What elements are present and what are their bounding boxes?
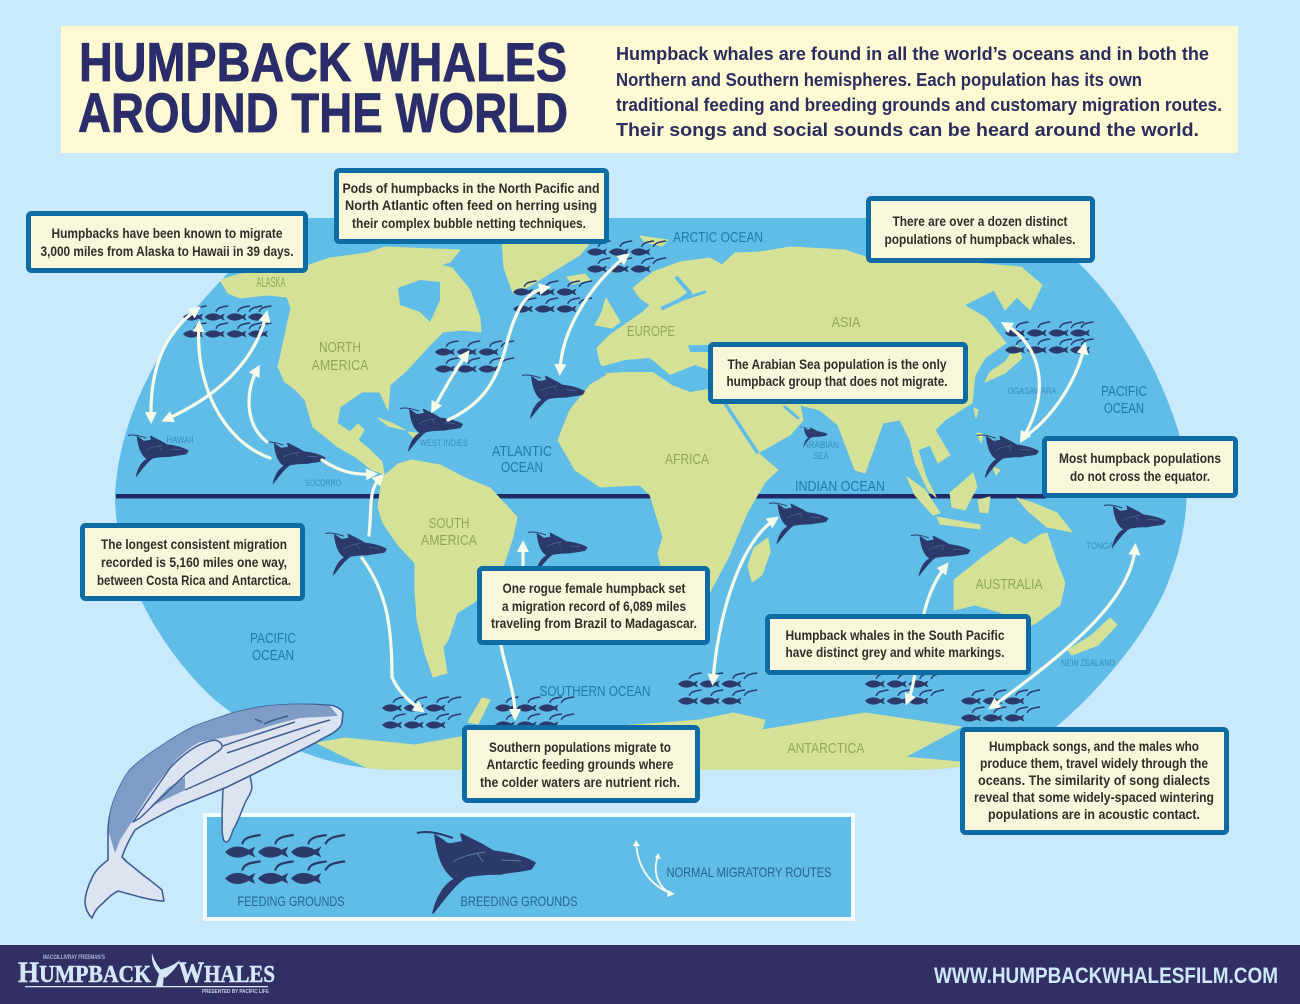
greenland [502,240,592,293]
intro text: Humpback whales are found in all the world’s oceans and in both the [616,44,1209,64]
region labels: SOCORRO [305,478,341,488]
footer [0,945,1300,1004]
callout: bubble netting: Pods of humpbacks in the North Pacific and [342,181,600,196]
callout: populations [868,198,1092,260]
inland seas [663,278,798,452]
callout: longest migration: The longest consistent migration [101,537,287,552]
region labels: AMERICA [312,357,368,374]
callout: arabian sea: The Arabian Sea population is the only [728,357,947,372]
callout: longest migration [82,526,302,598]
region labels: AFRICA [665,451,709,468]
callout: southern populations: the colder waters are nutrient rich. [480,775,680,790]
whale fin [222,775,252,842]
intro text: Their songs and social sounds can be heard around the world. [616,120,1199,140]
region labels: SEA [814,451,828,461]
region labels: ARCTIC OCEAN [673,229,763,246]
callout: alaska to hawaii: Humpbacks have been known to migrate [52,226,283,241]
legend: feeding grounds: FEEDING GROUNDS [238,893,344,909]
intro text: traditional feeding and breeding grounds and customary migration routes. [616,95,1222,115]
legend: feeding grounds [225,835,345,909]
callout: songs: oceans. The similarity of song dialects [978,773,1210,788]
callout: south pacific [768,616,1028,672]
region labels: SOUTH [428,515,470,532]
legend: breeding grounds: BREEDING GROUNDS [460,893,578,909]
region labels: NEW ZEALAND [1061,658,1115,668]
world map [115,218,1187,780]
title panel [61,26,1238,153]
callout: populations: There are over a dozen distinct [892,214,1068,229]
hudson bay [398,280,440,322]
callout: populations: populations of humpback whales. [884,232,1076,247]
continents [220,236,1117,780]
south america [378,460,517,677]
region labels: OCEAN [1104,400,1144,417]
callout: longest migration: recorded is 5,160 miles one way, [101,555,287,570]
callout: songs: populations are in acoustic contact. [988,807,1200,822]
callout: southern populations: Southern populations migrate to [489,740,671,755]
region labels: ASIA [832,314,860,331]
callout: southern populations: Antarctic feeding grounds where [486,757,674,772]
region labels: ANTARCTICA [788,740,864,757]
antarctica [316,712,962,770]
migration arrows [151,257,1135,715]
whale side patch [150,777,185,807]
region labels: INDIAN OCEAN [795,478,885,495]
callout: songs: produce them, travel widely through the [980,756,1208,771]
film logo [18,953,275,995]
region labels: EUROPE [627,323,675,340]
antarctic peninsula [468,698,490,724]
whale flipper and throat lines [133,716,330,822]
region labels: PACIFIC [250,630,296,647]
film logo: WHALES [178,956,275,989]
australia [954,533,1065,630]
callout: equator: do not cross the equator. [1070,469,1210,484]
southeast asia islands [907,408,1072,532]
title: AROUND THE WORLD [78,81,568,144]
callout: songs [962,730,1226,832]
region labels: OCEAN [252,647,294,664]
region labels: TONGA [1086,541,1114,551]
logo tail icon [152,953,180,986]
callout: southern populations [464,728,698,800]
region labels: AMERICA [421,532,477,549]
callout: bubble netting: their complex bubble netting techniques. [352,216,586,231]
region labels: WEST INDIES [420,438,468,448]
region labels: ATLANTIC [492,443,552,460]
whale dark back [109,704,338,853]
callout: songs: reveal that some widely-spaced wintering [974,790,1214,805]
illustration: leaping humpback whale [85,704,343,918]
whale body [85,704,343,918]
canadian arctic islands [367,246,460,265]
film logo: PRESENTED BY PACIFIC LIFE [202,989,269,995]
region labels: OCEAN [501,459,543,476]
region labels: ARABIAN [803,440,839,450]
new zealand [1068,618,1117,655]
british isles [595,298,620,328]
callout: rogue female: traveling from Brazil to Madagascar. [491,616,697,631]
caribbean islands [378,418,422,438]
callout: arabian sea [710,344,966,402]
equator [116,494,1046,498]
callout: equator [1044,438,1236,496]
region labels: AUSTRALIA [976,576,1042,593]
callout: south pacific: have distinct grey and white markings. [786,645,1004,660]
film logo: MACGILLIVRAY FREEMAN’S [43,955,105,961]
breeding ground markers [128,375,1165,576]
callout: rogue female: a migration record of 6,089 miles [502,599,686,614]
intro text [616,44,1222,140]
title [78,31,568,144]
legend: migratory routes: NORMAL MIGRATORY ROUTES [666,864,832,880]
iceland [567,274,590,284]
svalbard [640,236,668,246]
region labels: SOUTHERN OCEAN [540,683,650,700]
callout: bubble netting: North Atlantic often feed on herring using [345,198,597,213]
madagascar [748,538,770,582]
intro text: Northern and Southern hemispheres. Each population has its own [616,70,1142,90]
callout: arabian sea: humpback group that does not migrate. [726,374,948,389]
callout: songs: Humpback songs, and the males who [989,739,1199,754]
eurasia and africa [558,247,1042,625]
legend: breeding grounds [417,832,578,913]
legend: migratory routes [633,840,832,897]
region labels: ALASKA [256,274,286,291]
ocean [115,218,1187,770]
callout: equator: Most humpback populations [1059,451,1221,466]
callout: alaska to hawaii [28,214,306,270]
callout: longest migration: between Costa Rica and Antarctica. [97,573,291,588]
region labels: NORTH [319,339,361,356]
callout: rogue female: One rogue female humpback set [502,581,686,596]
region labels: PACIFIC [1101,383,1147,400]
north america [220,253,481,474]
film logo: HUMPBACK [18,956,151,989]
callout: rogue female [480,568,708,642]
region labels: OGASAWARA [1008,386,1056,396]
callout: bubble netting [336,170,606,242]
region labels: HAWAII [166,435,194,445]
title: HUMPBACK WHALES [79,31,567,93]
legend panel [205,815,853,919]
callout: alaska to hawaii: 3,000 miles from Alaska to Hawaii in 39 days. [40,244,294,259]
region labels [166,229,1147,757]
callout: south pacific: Humpback whales in the South Pacific [786,628,1005,643]
mediterranean [602,345,708,392]
feeding ground markers [183,241,1093,729]
japan [985,345,1022,382]
